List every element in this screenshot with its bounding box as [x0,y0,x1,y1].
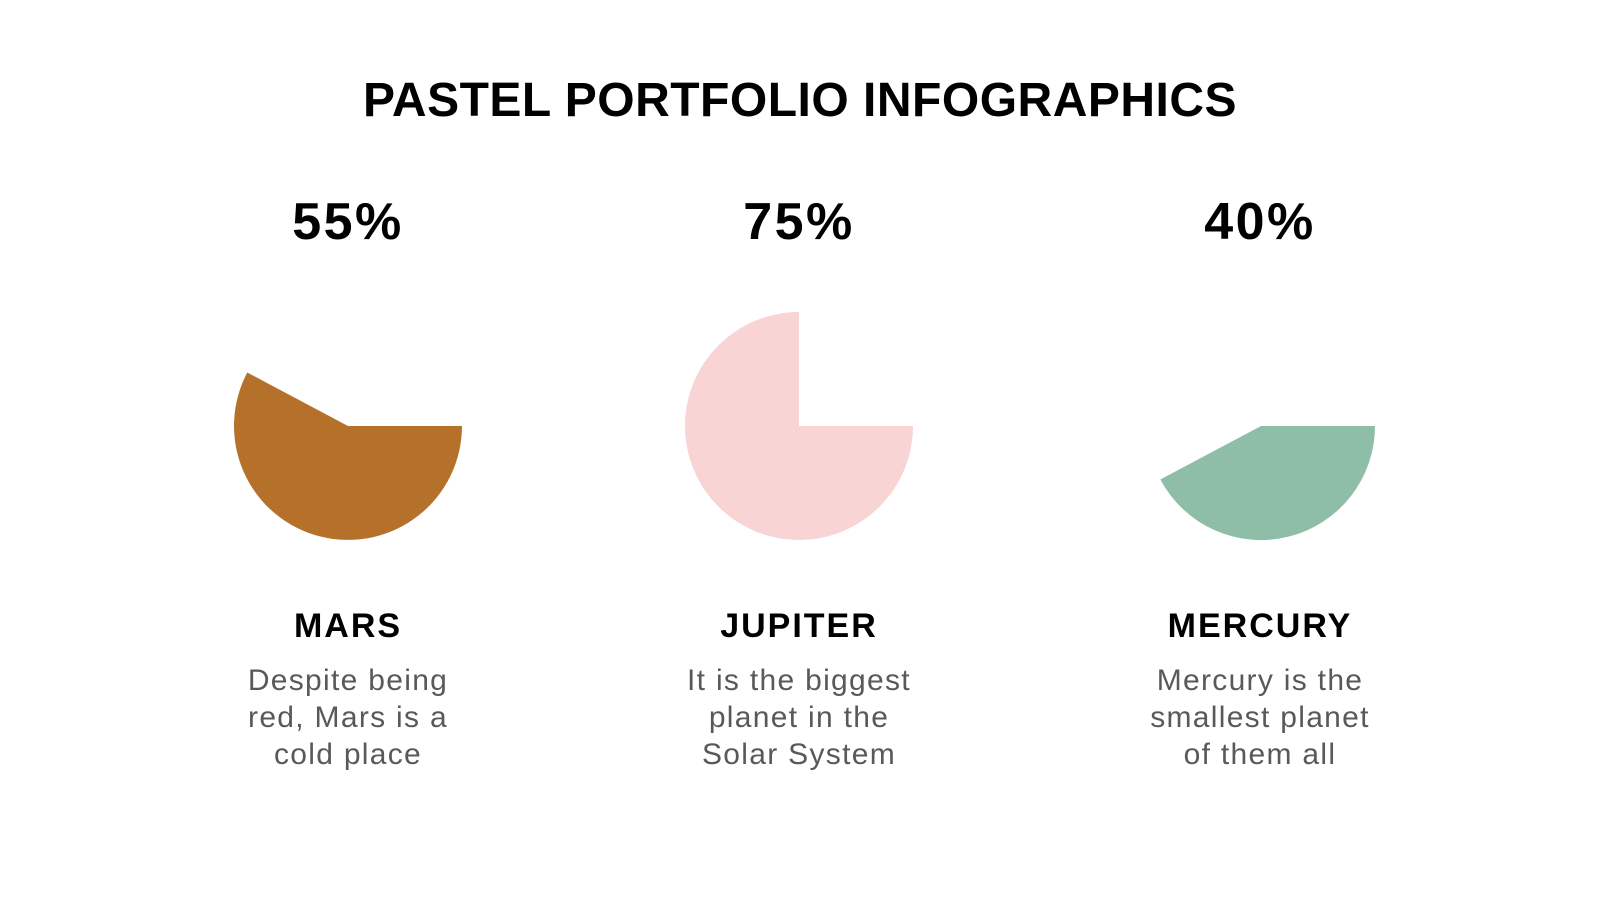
desc: mercury: smallest planet [1150,701,1370,734]
desc: mars: Despite being [248,664,448,697]
desc: jupiter: It is the biggest [687,664,911,697]
desc: mercury: of them all [1184,738,1336,771]
pie: mars 55% [234,372,462,540]
pie: mercury 40% [1160,426,1375,540]
name: jupiter: JUPITER [720,607,878,645]
desc: jupiter: Solar System [702,738,896,771]
desc: jupiter: planet in the [709,701,889,734]
name: mars: MARS [294,607,402,645]
desc: mercury [1150,664,1370,771]
title: PASTEL PORTFOLIO INFOGRAPHICS [363,74,1237,127]
desc: mars: cold place [274,738,422,771]
percent: jupiter: 75% [743,193,855,251]
desc: mars [248,664,448,771]
desc: mars: red, Mars is a [248,701,448,734]
percent: mars: 55% [292,193,404,251]
desc: jupiter [687,664,911,771]
name: mercury: MERCURY [1168,607,1352,645]
percent: mercury: 40% [1204,193,1316,251]
pie: jupiter 75% [685,312,913,540]
desc: mercury: Mercury is the [1157,664,1363,697]
